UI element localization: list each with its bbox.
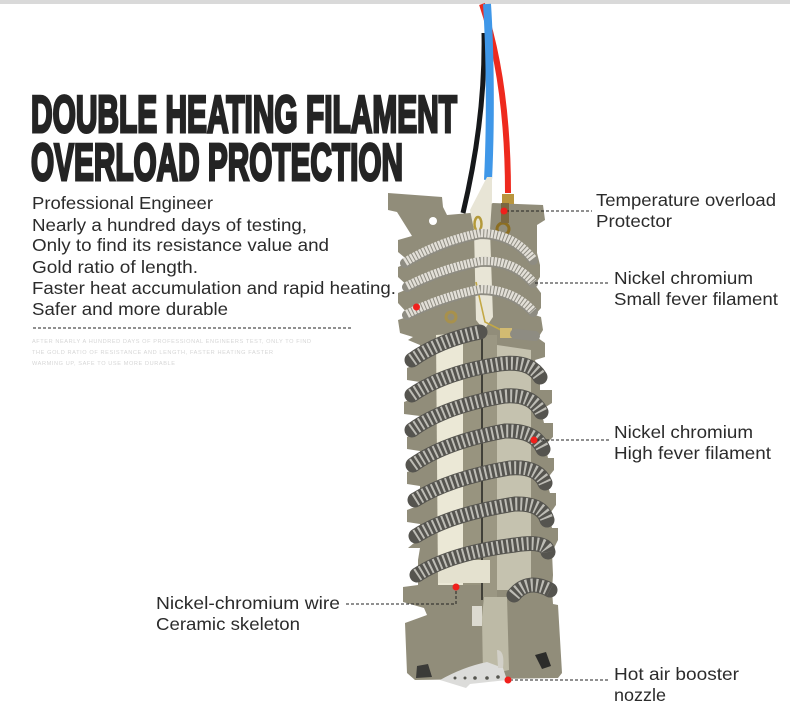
text block: description: Only to find its resistance value and [32, 235, 329, 255]
heating element illustration [388, 177, 562, 688]
label: temperature overload protector [596, 190, 776, 231]
mica plate [388, 193, 562, 680]
text block: description: Safer and more durable [32, 299, 228, 319]
text block: small grey caption: THE GOLD RATIO OF RESISTANCE AND LENGTH, FASTER HEATING FASTER [32, 350, 273, 356]
label: hot air booster nozzle: Hot air booster [614, 664, 739, 684]
label: temperature overload protector: Temperature overload [596, 190, 776, 210]
title [31, 86, 457, 192]
text block: small grey caption: AFTER NEARLY A HUNDRED DAYS OF PROFESSIONAL ENGINEERS TEST, ONLY TO FIND [32, 339, 311, 345]
text block: small grey caption [32, 339, 311, 367]
label: ceramic skeleton: Ceramic skeleton [156, 614, 300, 634]
hot air booster nozzle [416, 650, 551, 688]
ceramic strips [436, 177, 531, 676]
text block: description: Professional Engineer [32, 193, 213, 213]
title: OVERLOAD PROTECTION [31, 134, 403, 192]
label: small fever filament [614, 268, 778, 309]
top grey bar [0, 0, 790, 4]
label: high fever filament [614, 422, 771, 463]
wires: red, black and blue [463, 4, 508, 213]
label: ceramic skeleton: Nickel-chromium wire [156, 593, 340, 613]
text block: description [32, 193, 396, 319]
label: hot air booster nozzle [614, 664, 739, 705]
label: small fever filament: Small fever filament [614, 289, 778, 309]
leader lines and red markers [346, 208, 610, 684]
label: temperature overload protector: Protector [596, 211, 672, 231]
text block: small grey caption: WARMING UP, SAFE TO USE MORE DURABLE [32, 361, 175, 367]
label: ceramic skeleton [156, 593, 340, 634]
label: high fever filament: High fever filament [614, 443, 771, 463]
terminals [429, 194, 514, 338]
text block: description: Nearly a hundred days of testing, [32, 215, 307, 235]
text block: description: Faster heat accumulation and rapid heating. [32, 278, 396, 298]
title: DOUBLE HEATING FILAMENT [31, 86, 457, 144]
text block: description: Gold ratio of length. [32, 257, 198, 277]
label: small fever filament: Nickel chromium [614, 268, 753, 288]
high fever filament coils [412, 332, 550, 595]
small fever filament coils [405, 233, 535, 336]
label: high fever filament: Nickel chromium [614, 422, 753, 442]
label: hot air booster nozzle: nozzle [614, 685, 666, 705]
